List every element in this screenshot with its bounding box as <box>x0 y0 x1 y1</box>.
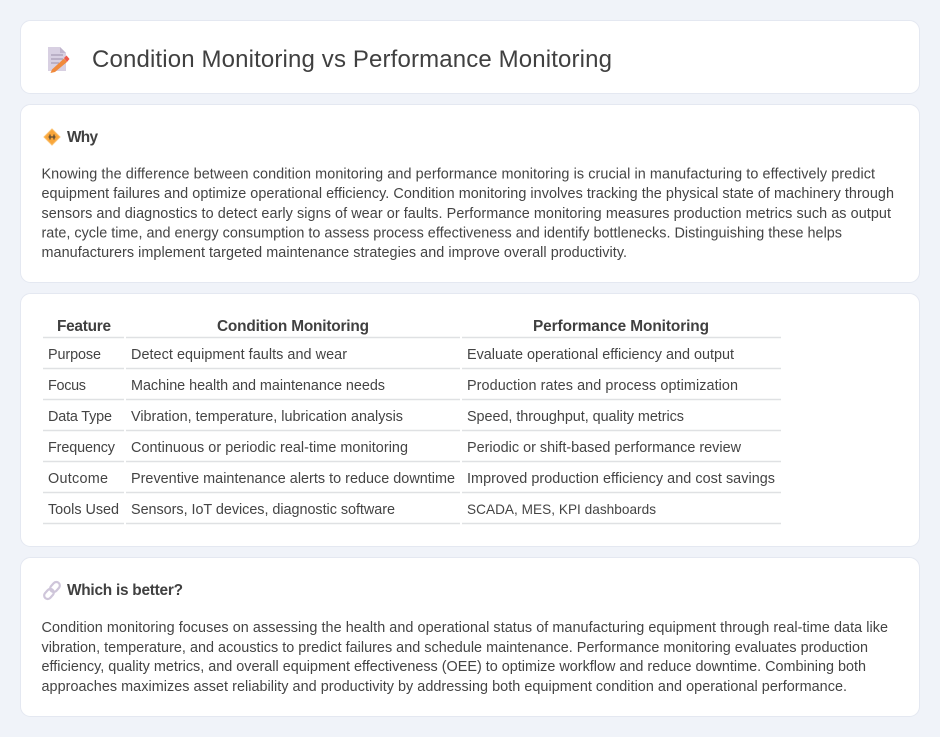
table row: frequency: Periodic or shift-based performance review <box>467 440 742 456</box>
text block: which is better explanation: efficiency, quality metrics, and overall equipment effectiveness (OEE) to optimize workflow and reduce downtime. Combining both <box>42 659 866 675</box>
table row: purpose: Purpose <box>48 347 101 363</box>
icon: link <box>43 581 61 600</box>
table row: data type: Speed, throughput, quality metrics <box>467 409 684 425</box>
table row: data type: Data Type <box>48 409 112 425</box>
table header row <box>57 318 709 335</box>
text block: which is better explanation: Condition monitoring focuses on assessing the health and operational status of manufacturing equipment through real-time data like <box>42 620 888 636</box>
table row: outcome: Outcome <box>48 471 108 487</box>
table header row: Condition Monitoring <box>217 318 369 335</box>
icon: document with pencil <box>48 47 70 73</box>
table row: focus: Focus <box>48 378 86 394</box>
heading: which is better: Which is better? <box>67 582 183 599</box>
table row: focus: Production rates and process optimization <box>467 378 738 394</box>
icon: warning diamond <box>44 129 60 145</box>
table row: outcome <box>48 471 775 487</box>
text block: why explanation: manufacturers implement targeted maintenance strategies and improve overall productivity. <box>42 245 627 261</box>
text block: which is better explanation <box>42 620 888 695</box>
heading: why: Why <box>67 129 98 146</box>
text block: which is better explanation: approaches maximizes asset reliability and productivity by addressing both equipment condition and operational performance. <box>42 679 847 695</box>
table row: frequency <box>48 440 742 456</box>
table row: frequency: Continuous or periodic real-time monitoring <box>131 440 408 456</box>
table row: focus: Machine health and maintenance needs <box>131 378 385 394</box>
table header row: Performance Monitoring <box>533 318 709 335</box>
table row: purpose <box>48 347 734 363</box>
table row: tools used: SCADA, MES, KPI dashboards <box>467 502 656 517</box>
table row: focus <box>48 378 738 394</box>
table row: tools used <box>48 502 656 518</box>
table row: data type: Vibration, temperature, lubrication analysis <box>131 409 403 425</box>
panel: comparison table <box>20 294 920 546</box>
title: Condition Monitoring vs Performance Monitoring <box>92 46 612 73</box>
text block: why explanation: equipment failures and optimize operational efficiency. Condition monitoring involves tracking the physical state of machinery through <box>42 186 894 202</box>
table row: data type <box>48 409 684 425</box>
panel: header <box>20 20 920 94</box>
table row: purpose: Detect equipment faults and wear <box>131 347 347 363</box>
panel: which is better <box>20 558 920 716</box>
text block: why explanation: rate, cycle time, and energy consumption to assess process effectiveness and identify bottlenecks. Distinguishing these helps <box>42 226 842 242</box>
table row: outcome: Preventive maintenance alerts to reduce downtime <box>131 471 455 487</box>
table header row: Feature <box>57 318 111 335</box>
table row: frequency: Frequency <box>48 440 116 456</box>
text block: why explanation <box>42 166 894 261</box>
table row: tools used: Sensors, IoT devices, diagnostic software <box>131 502 395 518</box>
table row: purpose: Evaluate operational efficiency and output <box>467 347 734 363</box>
table row: tools used: Tools Used <box>48 502 119 518</box>
text block: which is better explanation: vibration, temperature, and acoustics to predict failures and schedule maintenance. Performance monitoring evaluates production <box>42 640 868 656</box>
panel: why <box>20 104 920 282</box>
text block: why explanation: Knowing the difference between condition monitoring and performance monitoring is crucial in manufacturing to effectively predict <box>42 166 875 182</box>
text block: why explanation: sensors and diagnostics to detect early signs of wear or faults. Performance monitoring measures production metrics such as output <box>42 206 891 222</box>
table row: outcome: Improved production efficiency and cost savings <box>467 471 775 487</box>
